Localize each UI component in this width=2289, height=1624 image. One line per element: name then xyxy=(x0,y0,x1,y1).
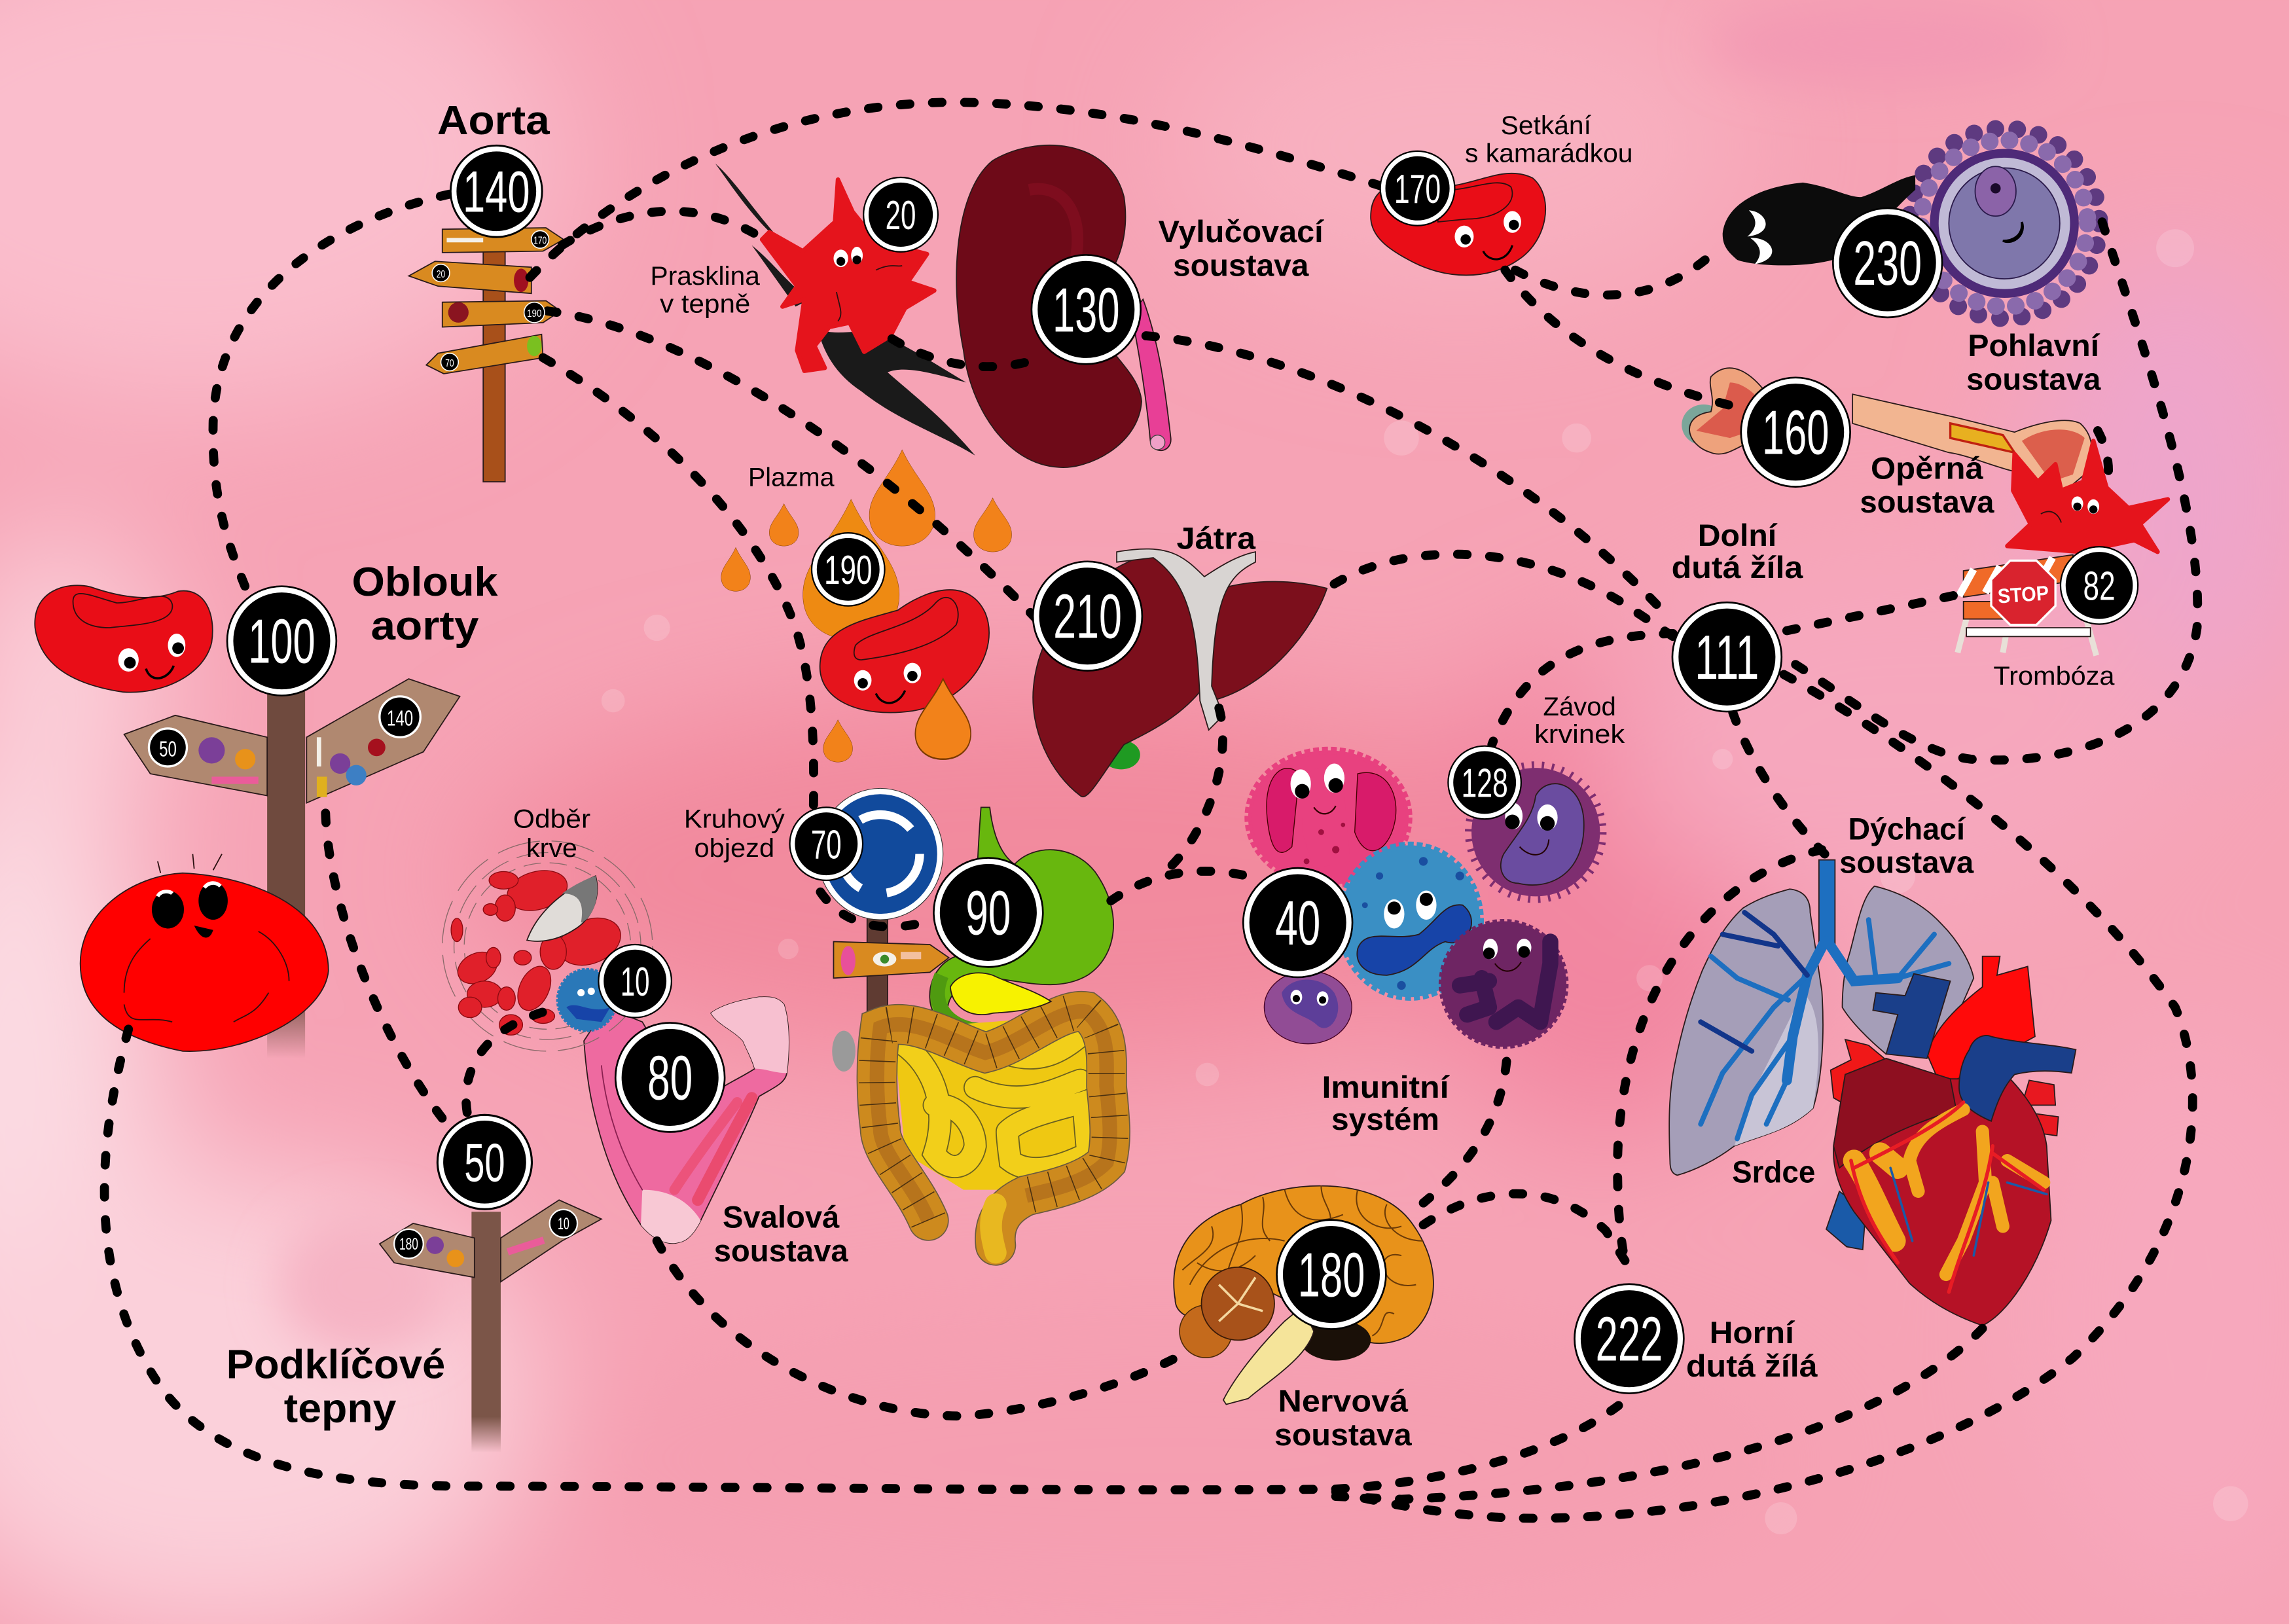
marker 140 xyxy=(450,145,543,238)
label: Vylučovací soustava: Vylučovací xyxy=(1159,215,1325,249)
dashed blood route xyxy=(105,102,2197,1518)
small intestine xyxy=(893,1015,1102,1190)
red blood cell: Oblouk aorty top xyxy=(35,585,213,693)
platelet star in crack xyxy=(715,164,975,456)
signpost: Podklíčové tepny xyxy=(380,1200,602,1453)
label: Opěrná soustava: soustava xyxy=(1860,485,1994,519)
label: Pohlavní soustava: Pohlavní xyxy=(1968,329,2100,363)
marker 160 xyxy=(1740,376,1851,488)
sign arm to 190 xyxy=(442,300,560,327)
small sign badges xyxy=(149,230,577,1259)
note: Závod krvinek: Závod xyxy=(1543,692,1616,721)
small sign badges: 10 xyxy=(558,1216,569,1233)
marker 128: 128 xyxy=(1461,761,1508,806)
heading: Oblouk aorty xyxy=(351,559,498,649)
stomach xyxy=(929,807,1113,1034)
note: Prasklina v tepně: v tepně xyxy=(660,289,750,318)
marker 50: 50 xyxy=(464,1132,505,1193)
heading: Aorta: Aorta xyxy=(437,98,550,143)
label: Játra: Játra xyxy=(1177,522,1256,556)
note: Kruhový objezd: objezd xyxy=(694,833,774,863)
marker 80: 80 xyxy=(647,1043,693,1113)
label: Opěrná soustava xyxy=(1860,452,1994,519)
note: Odběr krve: krve xyxy=(526,833,577,863)
note: Odběr krve xyxy=(513,804,590,863)
label: Imunitní systém: systém xyxy=(1331,1102,1439,1136)
marker 170: 170 xyxy=(1394,166,1441,212)
small sign badges: 50 xyxy=(159,737,177,761)
marker 160: 160 xyxy=(1762,398,1829,468)
small sign badges: 20 xyxy=(437,269,445,280)
label: Vylučovací soustava: soustava xyxy=(1173,249,1309,283)
marker 10: 10 xyxy=(621,959,649,1005)
sperm xyxy=(1723,175,1915,265)
marker 210: 210 xyxy=(1053,582,1122,652)
label: Nervová soustava: soustava xyxy=(1274,1418,1413,1452)
liver xyxy=(1033,549,1327,797)
note: Závod krvinek: krvinek xyxy=(1534,719,1625,749)
label: Pohlavní soustava xyxy=(1966,329,2101,397)
label: Imunitní systém xyxy=(1322,1070,1451,1136)
blue cell xyxy=(1340,845,1480,997)
spiky purple cell xyxy=(1471,768,1600,896)
marker 40 xyxy=(1242,867,1353,978)
sign arm to 170 xyxy=(442,228,564,253)
brain xyxy=(1174,1185,1433,1405)
heading: Podklíčové tepny: tepny xyxy=(284,1385,397,1431)
immune cells xyxy=(1248,750,1600,1047)
marker 100 xyxy=(226,585,337,696)
heading: Podklíčové tepny: Podklíčové xyxy=(226,1341,445,1387)
label: Opěrná soustava: Opěrná xyxy=(1871,452,1984,486)
marker 70: 70 xyxy=(811,821,842,867)
label: Pohlavní soustava: soustava xyxy=(1966,363,2101,397)
note: Plazma: Plazma xyxy=(748,463,835,492)
marker 222 xyxy=(1574,1283,1685,1394)
plasma drops xyxy=(721,450,1012,762)
marker 230 xyxy=(1832,208,1943,318)
marker 70 xyxy=(789,806,863,881)
pink cell xyxy=(1248,750,1409,885)
red blood cell in plasma xyxy=(820,590,989,759)
sign arm: left 50 xyxy=(124,715,267,796)
marker 170 xyxy=(1380,151,1456,226)
note: Odběr krve: Odběr xyxy=(513,804,590,834)
label: Nervová soustava: Nervová xyxy=(1278,1384,1409,1418)
big round red blood cell xyxy=(81,854,329,1051)
signpost: Oblouk aorty xyxy=(124,672,460,1058)
marker 111: 111 xyxy=(1695,623,1759,693)
label: Imunitní systém: Imunitní xyxy=(1322,1070,1451,1104)
sign arm: right 140 xyxy=(306,679,460,803)
signpost: Aorta xyxy=(408,228,564,482)
sign arm to 70 xyxy=(426,334,543,374)
heading: Podklíčové tepny xyxy=(226,1341,445,1431)
label: Svalová soustava: Svalová xyxy=(723,1200,840,1235)
note: Trombóza: Trombóza xyxy=(1993,661,2115,691)
stop barricade: STOP xyxy=(1997,581,2049,608)
note: Kruhový objezd xyxy=(684,804,785,863)
marker 80 xyxy=(615,1022,725,1133)
marker 230: 230 xyxy=(1853,228,1922,298)
small sign badges: 70 xyxy=(445,358,454,369)
heading: Oblouk aorty: aorty xyxy=(370,603,479,649)
note: Kruhový objezd: Kruhový xyxy=(684,804,785,834)
dark purple cell xyxy=(1441,921,1566,1047)
marker 111 xyxy=(1672,602,1782,712)
heading: Oblouk aorty: Oblouk xyxy=(351,559,498,605)
label: Horní dutá žíla: Horní xyxy=(1710,1316,1795,1350)
note: Prasklina v tepně: Prasklina xyxy=(651,261,761,291)
label: Dýchací soustava xyxy=(1839,812,1974,880)
marker 130 xyxy=(1031,254,1142,365)
heart xyxy=(1826,956,2076,1326)
label: Srdce: Srdce xyxy=(1732,1155,1815,1189)
sign arm to 20 xyxy=(408,261,532,293)
muscle arm xyxy=(584,997,789,1243)
marker 100: 100 xyxy=(248,607,315,677)
label: Svalová soustava xyxy=(714,1200,849,1268)
marker 50 xyxy=(437,1114,533,1210)
small purple cell xyxy=(1264,971,1352,1044)
platelet star on bone xyxy=(2008,441,2168,552)
marker 20 xyxy=(863,177,939,253)
sign arm right 10 xyxy=(501,1200,602,1282)
label: Nervová soustava xyxy=(1274,1384,1413,1452)
pancreas xyxy=(950,973,1051,1015)
stop barricade xyxy=(1958,555,2097,655)
marker 10 xyxy=(598,944,672,1019)
label: Horní dutá žíla xyxy=(1686,1316,1818,1383)
label: Dýchací soustava: Dýchací xyxy=(1848,812,1966,846)
note: Prasklina v tepně xyxy=(651,261,761,318)
label: Dolní dutá žíla: dutá žíla xyxy=(1672,550,1803,585)
note: Závod krvinek xyxy=(1534,692,1625,749)
label: Horní dutá žíla: dutá žílá xyxy=(1686,1349,1818,1383)
marker 20: 20 xyxy=(886,192,916,238)
large intestine xyxy=(877,1011,1110,1253)
marker 128 xyxy=(1447,746,1522,820)
label: Dýchací soustava: soustava xyxy=(1839,846,1974,880)
marker 190 xyxy=(811,532,886,607)
marker 140: 140 xyxy=(463,158,530,224)
marker 210 xyxy=(1032,560,1143,672)
small sign: senses xyxy=(833,942,949,978)
marker 40: 40 xyxy=(1275,888,1320,958)
marker 90 xyxy=(933,857,1044,968)
bone xyxy=(1682,368,2092,496)
marker 90: 90 xyxy=(965,878,1011,948)
label: Dolní dutá žíla xyxy=(1672,518,1803,585)
note: Setkání s kamarádkou: s kamarádkou xyxy=(1465,139,1633,168)
marker 180: 180 xyxy=(1298,1240,1365,1310)
label: Vylučovací soustava xyxy=(1159,215,1325,283)
marker 222: 222 xyxy=(1596,1305,1663,1375)
blood draw: needle and cells xyxy=(442,841,653,1051)
lungs xyxy=(1669,860,1974,1175)
note: Setkání s kamarádkou xyxy=(1465,111,1633,168)
red blood cell: Setkání s kamarádkou xyxy=(1371,173,1545,275)
small sign badges: 190 xyxy=(527,308,542,319)
marker 130: 130 xyxy=(1053,275,1120,345)
marker 82: 82 xyxy=(2083,564,2116,609)
blue cell in blood draw xyxy=(558,969,616,1031)
small sign badges: 170 xyxy=(533,235,547,246)
label: Dolní dutá žíla: Dolní xyxy=(1698,518,1778,552)
label: Svalová soustava: soustava xyxy=(714,1234,849,1268)
small sign badges: 180 xyxy=(399,1236,418,1254)
roundabout sign xyxy=(818,788,949,1072)
small sign badges: 140 xyxy=(387,706,413,731)
ovum with beads xyxy=(1909,128,2099,318)
kidney with ureter xyxy=(956,145,1171,467)
marker 180 xyxy=(1276,1219,1387,1330)
sign arm left 180 xyxy=(380,1223,475,1277)
marker 82 xyxy=(2060,546,2138,625)
digestive system xyxy=(877,807,1113,1253)
note: Setkání s kamarádkou: Setkání xyxy=(1501,111,1591,140)
marker 190: 190 xyxy=(824,547,873,593)
